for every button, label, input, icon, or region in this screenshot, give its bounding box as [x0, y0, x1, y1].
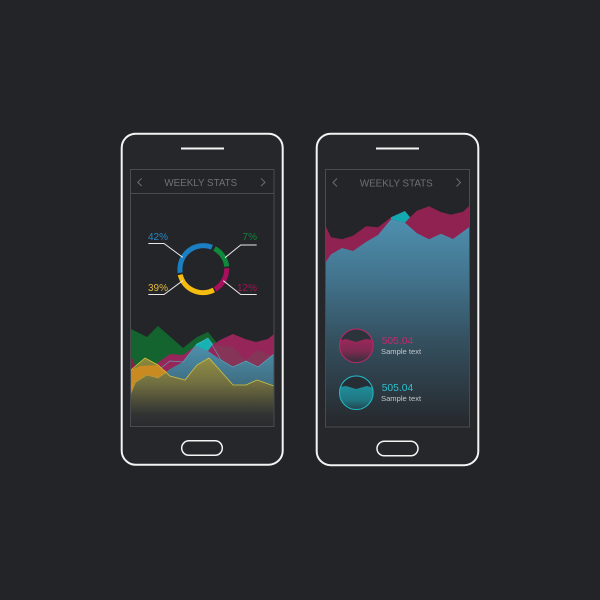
phone 2 body	[317, 134, 478, 465]
pink value: 505.04	[382, 336, 413, 347]
yellow area	[131, 358, 274, 427]
phone 2 back arrow	[333, 178, 337, 186]
teal peak	[196, 338, 213, 351]
phone 1 speaker	[181, 148, 224, 150]
teal peak	[391, 211, 410, 223]
cyan value: 505.04	[382, 383, 413, 394]
cyan caption: Sample text	[381, 394, 422, 403]
phone 1 body	[122, 134, 283, 465]
label 42%: 42%	[148, 232, 168, 243]
phone 2 forward arrow	[456, 178, 460, 186]
green segment	[214, 248, 227, 266]
area chart	[131, 326, 274, 427]
orange overlap	[131, 365, 167, 394]
yellow segment	[180, 275, 214, 293]
pink stat circle	[338, 329, 374, 364]
label 7%: 7%	[243, 232, 257, 243]
pink area	[156, 334, 274, 372]
green area	[131, 326, 216, 366]
phone 2 area chart	[326, 206, 469, 426]
phone 1 screen border over chart	[130, 170, 274, 426]
phone 2 speaker	[376, 148, 419, 150]
leader lines	[148, 244, 257, 294]
blue segment	[180, 246, 212, 273]
cyan stat circle	[338, 376, 374, 412]
label 12%: 12%	[237, 283, 257, 294]
phone 1 heading: WEEKLY STATS	[164, 178, 238, 189]
phone 2 screen border over chart	[326, 170, 470, 427]
infographic canvas	[120, 132, 480, 466]
pink area	[326, 206, 469, 300]
phone 2 home button	[377, 441, 418, 456]
donut chart	[180, 246, 227, 293]
phone 1 back arrow	[138, 178, 142, 186]
phone 1 home button	[182, 441, 222, 455]
phone 1 screen frame	[130, 170, 274, 426]
phone 2 screen frame	[326, 170, 470, 427]
blue area	[326, 219, 469, 426]
muted overlap	[215, 345, 271, 366]
phone 2	[317, 134, 478, 465]
phone 2 heading: WEEKLY STATS	[360, 178, 433, 190]
left crimson sliver	[131, 355, 136, 370]
phone 1	[122, 134, 283, 465]
label 39%: 39%	[148, 283, 168, 294]
pink caption: Sample text	[381, 347, 422, 356]
crimson segment	[215, 268, 227, 289]
blue area	[134, 346, 274, 386]
phone 1 forward arrow	[261, 178, 265, 186]
